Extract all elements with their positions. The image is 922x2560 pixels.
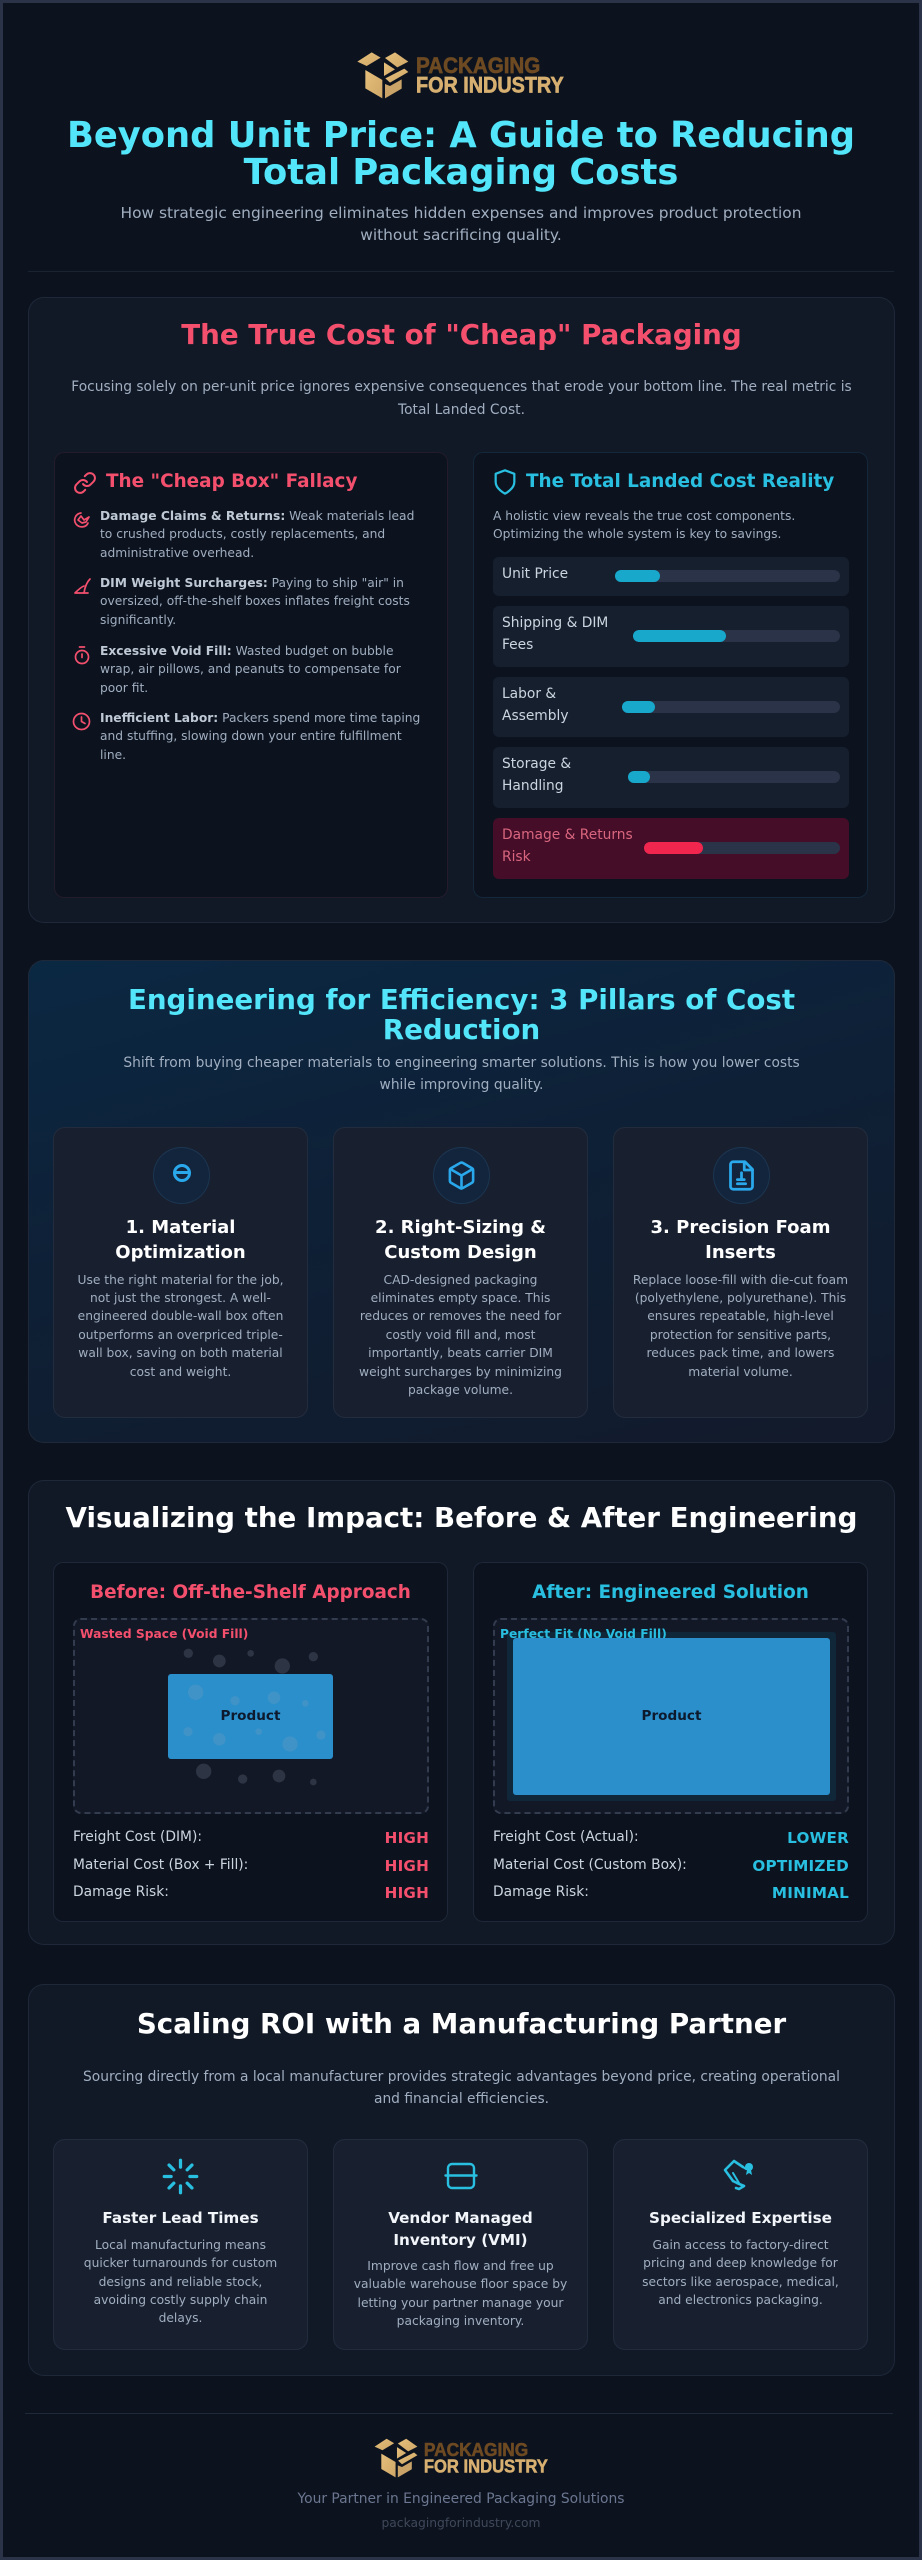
void fill peanuts [184,1648,326,1786]
subtitle [121,204,801,244]
card heading: The "Cheap Box" Fallacy [106,471,357,492]
metric: freight [73,1829,429,1847]
label: Unit Price [502,566,568,582]
foam insert [507,1632,836,1801]
metric: freight: Freight Cost (DIM): [73,1829,202,1845]
card: total landed cost [473,452,868,898]
text: administrative overhead. [100,546,254,560]
header logo: PACKAGING [416,53,540,78]
intro text: Sourcing directly from a local manufacturer provides strategic advantages beyond price, creating operational [83,2069,840,2085]
title: Total Packaging Costs [244,152,678,193]
footer logo: FOR INDUSTRY [424,2456,549,2477]
text [100,509,414,560]
intro text [71,379,852,418]
intro text [83,2069,840,2107]
intro text: and financial efficiencies. [374,2091,549,2107]
subtitle: without sacrificing quality. [360,226,562,244]
icon: shield [494,469,516,495]
bar [615,570,840,582]
title [67,115,855,193]
label: Labor & [502,686,556,702]
heading: Engineering for Efficiency: 3 Pillars of Cost [128,983,795,1016]
pillar heading [375,1217,546,1263]
card heading: The Total Landed Cost Reality [526,471,834,492]
intro text: Shift from buying cheaper materials to engineering smarter solutions. This is how you lower costs [123,1055,800,1071]
heading: Scaling ROI with a Manufacturing Partner [137,2007,786,2040]
text: wrap, air pillows, and peanuts to compensate for [100,662,401,676]
metric: damage: Damage Risk: [493,1884,589,1900]
pillar text: costly void fill and, most [386,1328,535,1342]
panel: scaling roi [28,1984,895,2376]
bar row: labor [493,677,849,737]
intro text: Focusing solely on per-unit price ignores expensive consequences that erode your bottom line. The real metric is [71,379,852,395]
pillar 2 [333,1127,588,1418]
diagram: oversized box with void fill [73,1618,429,1814]
pillar text: importantly, beats carrier DIM [368,1346,553,1360]
pillar text: outperforms an overpriced triple- [78,1328,283,1342]
text: DIM Weight Surcharges: Paying to ship "air" in [100,576,404,590]
header logo [357,52,564,98]
pillar text: weight surcharges by minimizing [359,1365,562,1379]
text [100,576,410,627]
bar [622,701,840,713]
pillar heading: 1. Material [126,1217,235,1238]
card: cheap box fallacy [54,452,448,898]
card text: Improve cash flow and free up [367,2259,554,2273]
pillar text: ensures repeatable, high-level [647,1309,834,1323]
icon: chain link [74,472,96,494]
pillar text: reduces pack time, and lowers [647,1346,834,1360]
icon: timer [74,646,90,664]
text [100,711,420,762]
icon: loader [162,2158,198,2194]
description [493,509,795,541]
metric: freight: HIGH [385,1829,429,1847]
card: specialized expertise [613,2139,868,2350]
intro text [123,1055,800,1093]
card text: letting your partner manage your [358,2296,563,2310]
card heading: Inventory (VMI) [393,2231,528,2249]
label: Fees [502,637,533,653]
pillar text: engineered double-wall box often [78,1309,283,1323]
text: poor fit. [100,681,148,695]
card text [613,2236,868,2309]
bar row: shipping [493,606,849,667]
metric: material: Material Cost (Custom Box): [493,1857,687,1873]
bar row: damage risk [493,818,849,879]
diagram: custom fit box [493,1618,849,1814]
card text: delays. [159,2311,202,2325]
pillar heading [651,1217,830,1263]
intro text: Total Landed Cost. [398,402,525,418]
item: inefficient labor [72,711,420,762]
icon: scale [74,578,91,594]
heading [128,983,795,1046]
pillar text: CAD-designed packaging [384,1272,537,1286]
pillar heading: Inserts [705,1242,776,1263]
card text: avoiding costly supply chain [94,2293,267,2307]
description: Optimizing the whole system is key to savings. [493,527,781,541]
metric: freight: LOWER [787,1829,849,1847]
pillar heading [115,1217,246,1263]
heading: Reduction [383,1013,540,1046]
card text: pricing and deep knowledge for [643,2256,838,2270]
label [502,756,571,794]
pillar heading: Custom Design [384,1242,537,1263]
bar row: unit price [493,557,849,596]
panel: before and after [28,1480,895,1945]
bar row: storage [493,747,849,808]
metric: freight: Freight Cost (Actual): [493,1829,639,1845]
bar [633,630,840,642]
text: Excessive Void Fill: Wasted budget on bubble [100,644,394,658]
pillar heading: 2. Right-Sizing & [375,1217,546,1238]
heading: The True Cost of "Cheap" Packaging [181,318,742,351]
heading: Visualizing the Impact: Before & After Engineering [66,1501,857,1534]
card heading: After: Engineered Solution [532,1582,809,1603]
label: Shipping & DIM [502,615,608,631]
pillar 3 [613,1127,868,1418]
pillar 1 [53,1127,308,1418]
card text: valuable warehouse floor space by [354,2277,567,2291]
label: Damage & Returns [502,827,633,843]
header logo: FOR INDUSTRY [416,73,564,98]
card: vmi [333,2139,588,2350]
card heading: Specialized Expertise [649,2209,832,2227]
metric: damage: HIGH [385,1884,429,1902]
label [502,615,608,653]
card heading [333,2208,588,2251]
card heading: Faster Lead Times [102,2209,259,2227]
panel: true cost of cheap packaging [28,297,895,923]
pillar text: material volume. [688,1365,793,1379]
metric: damage: MINIMAL [772,1884,849,1902]
item: void fill [74,644,401,695]
icon: foam document [712,1146,770,1204]
card: after [473,1562,868,1922]
product block [168,1674,333,1759]
metric: freight [493,1829,849,1847]
icon: material [152,1146,210,1204]
card: before [53,1562,448,1922]
card text [53,2236,308,2328]
pillar text: eliminates empty space. This [371,1291,550,1305]
pillar text [633,1272,848,1379]
pillar text: not just the strongest. A well- [90,1291,271,1305]
panel: three pillars [28,960,895,1443]
pillar text: Replace loose-fill with die-cut foam [633,1272,848,1286]
card text: packaging inventory. [397,2314,524,2328]
label [502,827,633,865]
label: Storage & [502,756,571,772]
card text: Local manufacturing means [95,2238,266,2252]
item: damage claims [74,509,414,560]
bar [644,842,840,854]
pillar heading: 3. Precision Foam [651,1217,830,1238]
icon: damage [74,512,90,528]
footer url: packagingforindustry.com [381,2516,541,2530]
card text [333,2257,588,2330]
icon: clock [72,712,90,730]
card heading: Vendor Managed [388,2209,533,2227]
label: Assembly [502,708,568,724]
pillar text: (polyethylene, polyurethane). This [635,1291,846,1305]
icon: box [432,1146,490,1204]
text: line. [100,748,126,762]
footer logo: PACKAGING [424,2439,529,2460]
subtitle: How strategic engineering eliminates hidden expenses and improves product protection [121,204,801,222]
label: Risk [502,849,531,865]
card: faster lead times [53,2139,308,2350]
text [100,644,401,695]
pillar text: reduces or removes the need for [360,1309,561,1323]
product block [513,1638,830,1795]
label [502,686,568,724]
item: dim weight [74,576,410,627]
pillar text: cost and weight. [130,1365,231,1379]
header divider [28,271,894,272]
metric: damage [73,1884,429,1902]
text: Inefficient Labor: Packers spend more time taping [100,711,420,725]
text: and stuffing, slowing down your entire fulfillment [100,729,402,743]
icon: inventory [444,2162,478,2190]
metric: damage [493,1884,849,1902]
card heading: Before: Off-the-Shelf Approach [90,1582,411,1603]
text: significantly. [100,613,176,627]
label: Perfect Fit (No Void Fill) [500,1627,667,1641]
intro text: while improving quality. [380,1077,543,1093]
metric: material [73,1857,429,1875]
label: Handling [502,778,564,794]
pillar text [77,1272,284,1379]
metric: material [493,1857,849,1875]
pillar text: protection for sensitive parts, [650,1328,831,1342]
text: oversized, off-the-shelf boxes inflates freight costs [100,594,410,608]
description: A holistic view reveals the true cost components. [493,509,795,523]
pillar heading: Optimization [115,1242,246,1263]
footer divider [25,2413,893,2414]
product block: Product [642,1708,701,1724]
metric: material: Material Cost (Box + Fill): [73,1857,248,1873]
card text: Gain access to factory-direct [652,2238,828,2252]
metric: material: HIGH [385,1857,429,1875]
text: to crushed products, costly replacements, and [100,527,385,541]
footer tagline: Your Partner in Engineered Packaging Solutions [297,2491,625,2507]
text: Damage Claims & Returns: Weak materials lead [100,509,414,523]
pillar text: wall box, saving on both material [78,1346,283,1360]
card text: quicker turnarounds for custom [84,2256,277,2270]
pillar text: Use the right material for the job, [77,1272,284,1286]
card text: designs and reliable stock, [99,2275,262,2289]
card text: and electronics packaging. [658,2293,823,2307]
metric: damage: Damage Risk: [73,1884,169,1900]
product block: Product [220,1708,280,1724]
label: Wasted Space (Void Fill) [80,1627,248,1641]
footer logo [360,2420,570,2487]
pillar text: package volume. [408,1383,513,1397]
pillar text [359,1272,562,1397]
metric: material: OPTIMIZED [752,1857,849,1875]
title: Beyond Unit Price: A Guide to Reducing [67,115,855,156]
bar [628,771,840,783]
card text: sectors like aerospace, medical, [642,2275,839,2289]
icon: expertise [723,2159,757,2191]
